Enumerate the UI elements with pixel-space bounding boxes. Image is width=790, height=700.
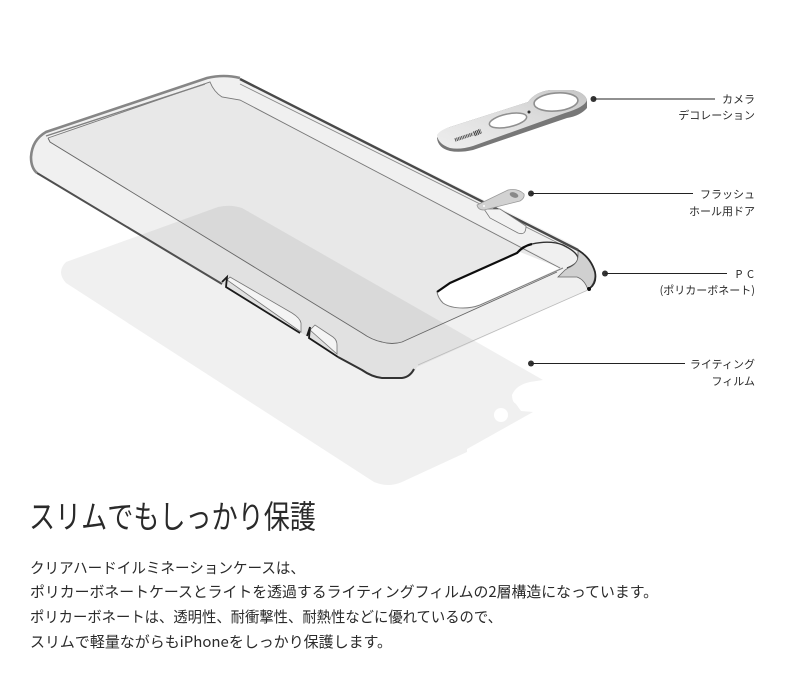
callout: camera decoration: カメラ <box>722 91 755 107</box>
body text: ポリカーボネートは、透明性、耐衝撃性、耐熱性などに優れているので、 <box>30 606 502 627</box>
camera opening <box>437 252 560 308</box>
callout: camera decoration: デコレーション <box>678 107 755 123</box>
callout: camera decoration <box>590 91 755 123</box>
screen area <box>48 82 563 344</box>
callout: lighting film: ライティング <box>690 356 755 372</box>
body text: ポリカーボネートケースとライトを透過するライティングフィルムの2層構造になっています。 <box>30 581 658 602</box>
inner screen edge <box>48 138 557 344</box>
callout: flash hole door: ホール用ドア <box>689 203 755 219</box>
camera opening edge <box>437 244 532 292</box>
camera decoration plate <box>437 90 587 152</box>
volume button cutout <box>222 277 301 333</box>
lower right edge <box>418 290 588 365</box>
body text: クリアハードイルミネーションケースは、 <box>30 557 305 578</box>
side button cutout <box>307 325 338 357</box>
corner tip <box>558 250 595 290</box>
callout: flash hole door: フラッシュ <box>700 186 755 202</box>
phone case shell <box>31 76 596 379</box>
lighting film sheet <box>61 206 543 485</box>
callout: PC polycarbonate <box>602 266 755 298</box>
flash hole door <box>477 190 524 210</box>
callout: flash hole door <box>528 186 755 219</box>
body text: スリムで軽量ながらもiPhoneをしっかり保護します。 <box>30 631 392 652</box>
flash slot <box>484 209 526 234</box>
body text <box>30 557 658 652</box>
callout: lighting film: フィルム <box>711 373 755 389</box>
outer rim <box>31 76 240 173</box>
callout: lighting film <box>528 356 755 389</box>
callout: PC polycarbonate: P C <box>736 266 755 282</box>
illustration: exploded view of phone case <box>31 76 596 485</box>
callout: PC polycarbonate: (ポリカーボネート) <box>660 282 755 298</box>
heading: スリムでもしっかり保護 <box>29 492 316 538</box>
